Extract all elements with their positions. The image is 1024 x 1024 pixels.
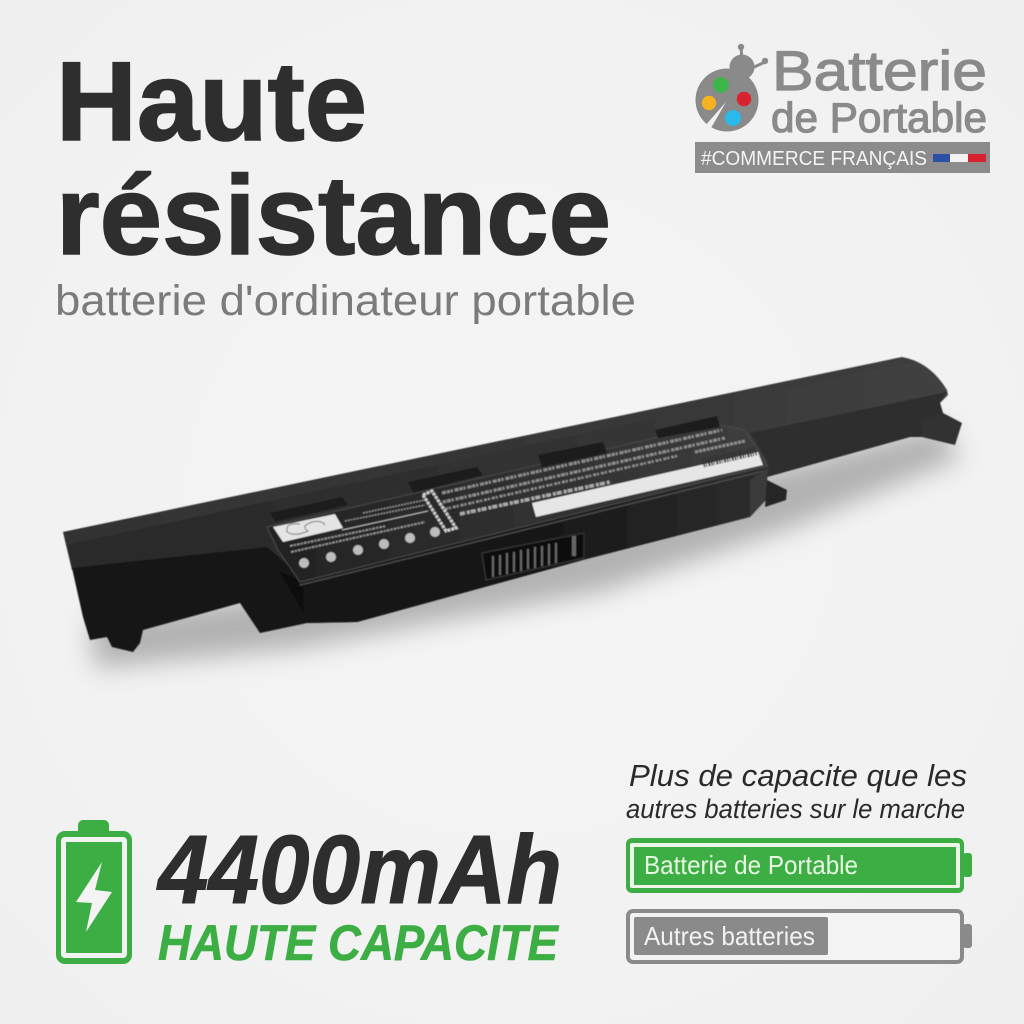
logo tag: commerce français: #COMMERCE FRANÇAIS [701,148,927,170]
battery right lower panel [750,392,947,477]
logo wordmark: de Portable [771,94,987,141]
logo [695,39,990,173]
battery photo [63,357,962,652]
logo wordmark: Batterie [772,39,987,102]
battery tabs [270,416,720,522]
battery label face [267,424,768,582]
title [56,39,611,278]
logo tag: commerce français [695,142,990,173]
title: résistance [56,153,611,278]
white strip [532,452,763,517]
rotated label badge [423,491,456,531]
logo wordmark [771,39,987,141]
bar: batterie de portable [626,838,972,893]
title: Haute [56,39,367,164]
label print lines [290,430,745,552]
battery right clip [922,413,962,445]
capacity caption: HAUTE CAPACITE [158,915,560,971]
battery rear tube [63,357,948,600]
bar: autres batteries: Autres batteries [644,921,815,951]
barcode [703,451,756,463]
bar: autres batteries [628,911,972,962]
battery left lower body [72,547,583,652]
battery side tab [765,480,787,507]
battery shadow [90,425,960,668]
bar: batterie de portable: Batterie de Portable [644,850,858,880]
warning icons [299,527,440,568]
comparison heading: Plus de capacite que les [629,758,967,793]
icon: green battery [56,820,132,964]
battery front block [278,464,768,623]
comparison heading [626,758,967,824]
battery corner facet [750,468,768,517]
white sticker with logo [273,514,343,542]
subtitle: batterie d'ordinateur portable [55,277,636,325]
icon: ladybug palette [696,44,768,131]
battery tube shading [63,357,912,545]
battery edge highlight [300,470,768,585]
charging connector [482,533,584,580]
comparison heading: autres batteries sur le marche [626,794,965,824]
capacity value: 4400mAh [156,815,562,924]
